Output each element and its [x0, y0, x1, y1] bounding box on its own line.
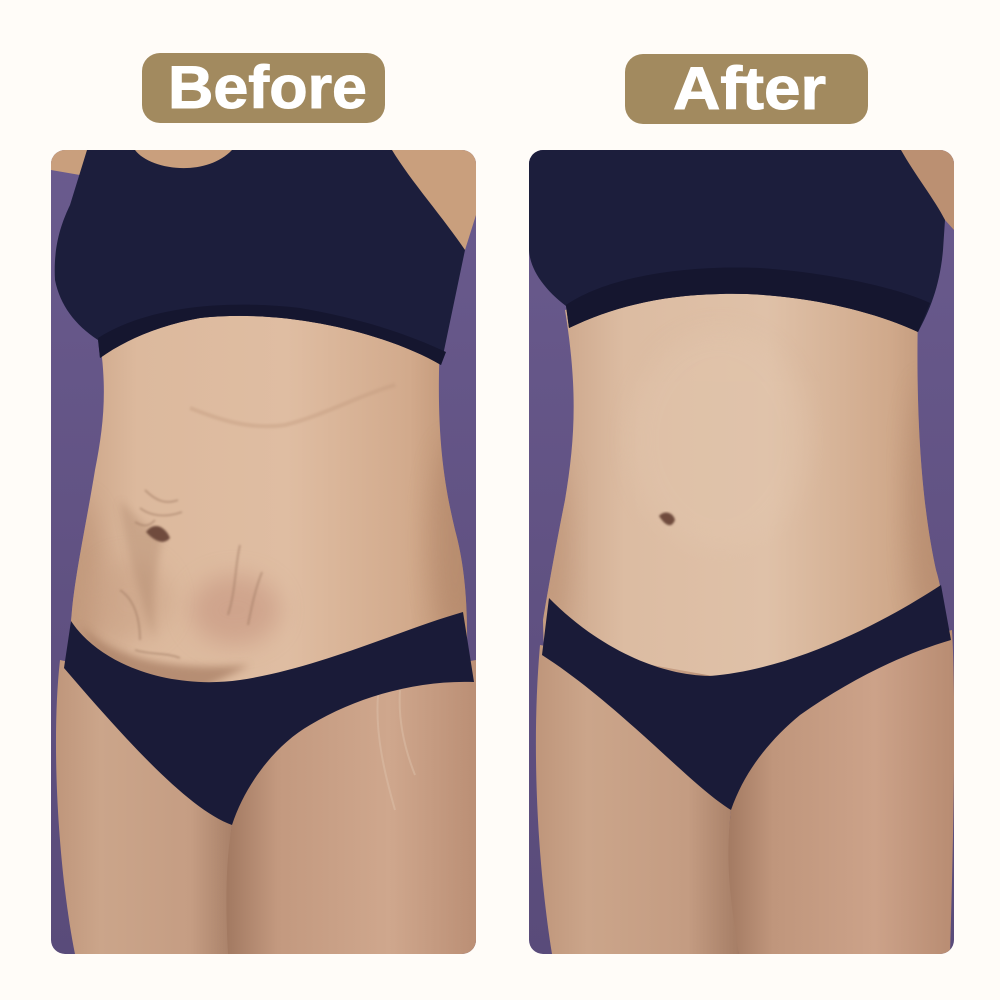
stretch marks	[377, 690, 415, 810]
torso	[70, 316, 468, 682]
photo backdrop	[51, 150, 476, 954]
bra	[529, 150, 945, 332]
torso shading	[534, 330, 952, 640]
bra	[55, 150, 465, 365]
navel	[659, 513, 675, 525]
panel: after photo	[529, 150, 954, 954]
left thigh	[536, 645, 739, 954]
briefs	[64, 612, 474, 825]
briefs	[542, 585, 951, 810]
upper skin: right shoulder	[900, 150, 954, 230]
navel	[146, 526, 170, 542]
torso	[543, 294, 940, 676]
label: After	[625, 54, 868, 124]
upper skin: shoulders and chest	[51, 150, 476, 250]
photo backdrop	[529, 150, 954, 954]
right thigh	[728, 630, 954, 954]
label: Before: Before	[168, 54, 367, 121]
label: After: After	[673, 55, 826, 122]
left thigh	[56, 660, 240, 954]
bra band	[566, 267, 930, 332]
torso shading	[58, 385, 479, 695]
skin creases	[120, 490, 262, 658]
panel: before photo	[51, 150, 479, 954]
bra band	[98, 305, 446, 365]
right thigh	[226, 660, 476, 954]
